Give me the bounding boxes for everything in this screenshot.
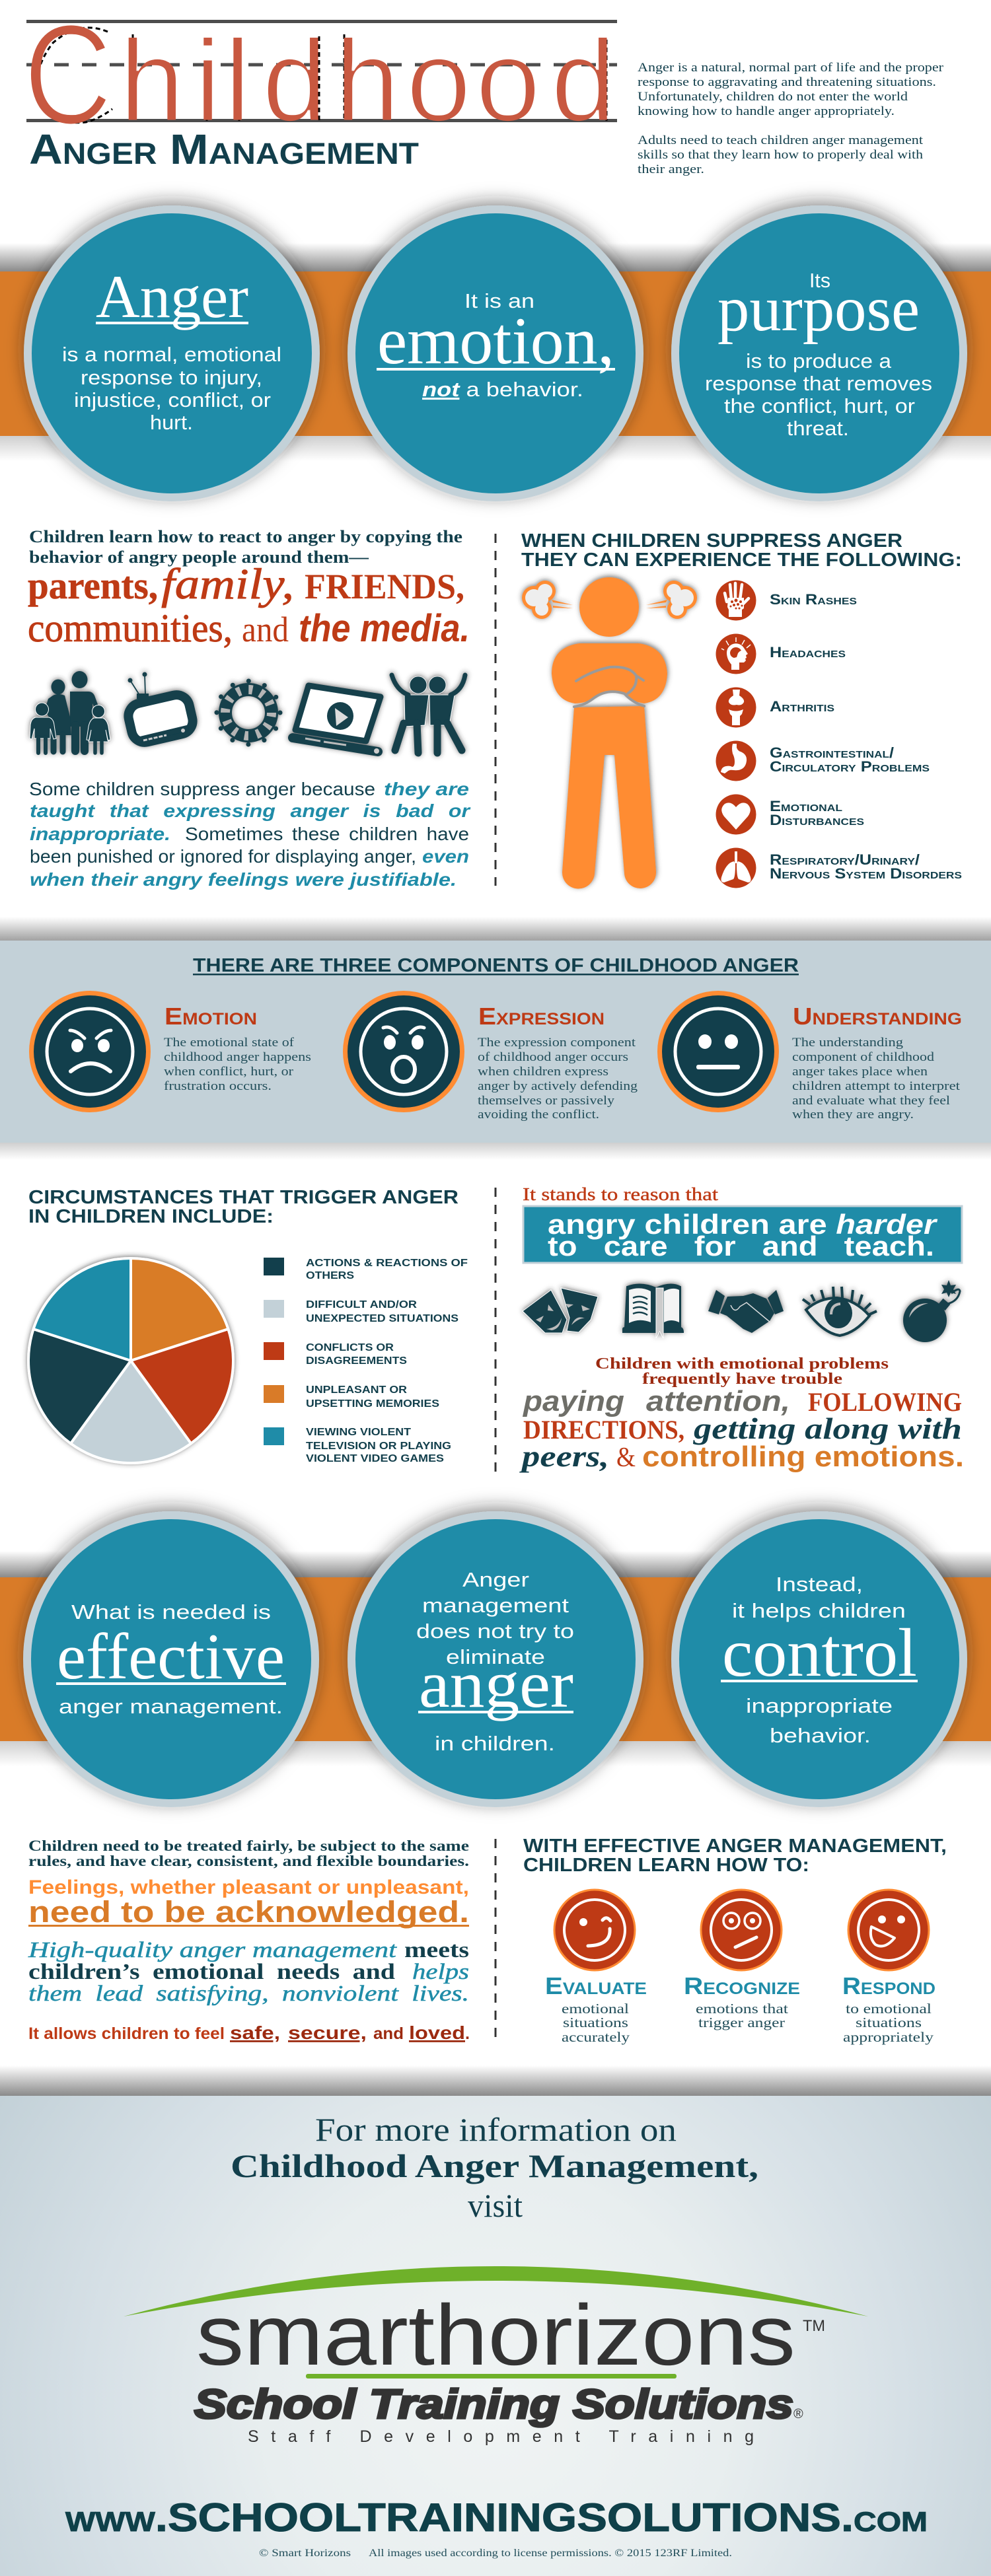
text: high-quality anger management (28, 1938, 469, 2006)
text: high-quality anger management: meets (404, 1938, 469, 1962)
text: feelings need to be acknowledged (28, 1877, 469, 1929)
circle: anger management does not eliminate: in children. (435, 1732, 555, 1755)
labels: suppressed anger effects: Emotional (770, 798, 842, 814)
circle: purpose: is to produce a (746, 349, 892, 373)
intro text: Unfortunately, children do not enter the world (638, 90, 908, 104)
legend: triggers: ACTIONS & REACTIONS OF (306, 1258, 468, 1269)
step: respond: to emotional (846, 2001, 932, 2017)
text: for more information (231, 2111, 758, 2224)
legend: triggers: OTHERS (306, 1270, 354, 1281)
text: children copy anger: behavior of angry people around them— (29, 548, 369, 567)
circle: control: Instead, (776, 1573, 863, 1596)
step: recognize (684, 1972, 800, 2030)
circle: control: behavior. (770, 1724, 871, 1747)
text: children with emotional problems: Children with emotional problems (595, 1355, 889, 1373)
text: why children suppress anger: they are (384, 779, 469, 799)
text: why children suppress anger: taught that expressing anger is bad or (30, 801, 471, 821)
component: understanding: component of childhood (792, 1050, 935, 1064)
big text: troubles list: DIRECTIONS, (523, 1415, 684, 1445)
component: understanding: anger takes place when (792, 1065, 928, 1079)
text: high-quality anger management: High-quality anger management (28, 1938, 398, 1962)
component: expression (478, 1003, 638, 1122)
labels: suppressed anger effects: Arthritis (770, 698, 834, 715)
step: recognize: Recognize (684, 1972, 800, 1999)
component: expression: Expression (478, 1003, 605, 1030)
legend: triggers: TELEVISION OR PLAYING (306, 1441, 451, 1452)
text: for more information: For more information on (315, 2111, 677, 2148)
text: why children suppress anger: when their angry feelings were justifiable. (30, 869, 457, 890)
legend: triggers: DIFFICULT AND/OR (306, 1299, 418, 1310)
component: emotion: Emotion (165, 1003, 257, 1030)
step: respond: appropriately (843, 2029, 934, 2045)
orange band top (0, 243, 991, 461)
text: for more information: Childhood Anger Management, (231, 2147, 758, 2184)
pie chart: triggers (28, 1258, 233, 1463)
legend: triggers: VIOLENT VIDEO GAMES (306, 1453, 444, 1464)
labels: suppressed anger effects: Disturbances (770, 812, 864, 828)
circle: effective: anger management. (59, 1695, 283, 1718)
labels: suppressed anger effects: Skin Rashes (770, 591, 857, 608)
circle: anger management does not eliminate: Anger (462, 1568, 529, 1591)
callout: harder to care for: to care for and teach. (548, 1231, 934, 1262)
heading: with effective anger management: WITH EFFECTIVE ANGER MANAGEMENT, (523, 1836, 947, 1857)
logo: smart horizons (124, 2266, 868, 2446)
callout: harder to care for (523, 1206, 962, 1263)
circle: effective: What is needed is (71, 1600, 271, 1624)
title: Childhood on handwriting lines: C (24, 0, 112, 154)
step: recognize: trigger anger (698, 2015, 785, 2030)
text: it stands to reason: It stands to reason that (523, 1184, 719, 1204)
intro text: their anger. (638, 162, 704, 176)
text: safe secure loved: secure, (288, 2022, 367, 2043)
icon: television (126, 672, 196, 745)
big text: troubles list: paying (523, 1385, 624, 1417)
intro text: Anger is a natural, normal part of life and the proper (638, 61, 944, 75)
circle: Anger (24, 205, 320, 501)
heading: with effective anger management: CHILDREN LEARN HOW TO: (523, 1855, 809, 1876)
icon: neutral face (657, 991, 779, 1112)
copyright: All images used according to license permissions. © 2015 123RF Limited. (369, 2548, 732, 2559)
icon: stomach (716, 741, 756, 781)
text: boundaries: Children need to be treated fairly, be subject to the same (28, 1838, 469, 1854)
logo: smart horizons: Staff Development Training (248, 2427, 760, 2446)
heading: when children suppress anger: WHEN CHILDREN SUPPRESS ANGER (521, 530, 902, 552)
step: respond (842, 1972, 936, 2045)
icon: skin rashes (716, 580, 756, 621)
step: evaluate: Evaluate (545, 1972, 647, 1999)
circle: control: inappropriate (746, 1694, 893, 1717)
labels: suppressed anger effects: Headaches (770, 644, 846, 661)
legend: triggers: UNEXPECTED SITUATIONS (306, 1313, 459, 1324)
text: boundaries (28, 1838, 469, 1869)
text: for more information: visit (468, 2187, 523, 2224)
labels: suppressed anger effects: Respiratory/Urinary/ (770, 851, 920, 868)
circle: purpose: Its (809, 269, 830, 292)
circle: anger management does not eliminate: management (422, 1594, 569, 1617)
step: evaluate: emotional (562, 2001, 629, 2017)
big text: troubles list: & (616, 1443, 636, 1473)
step: recognize: emotions that (696, 2001, 788, 2017)
step: evaluate: accurately (562, 2029, 630, 2045)
text: safe secure loved: loved (409, 2022, 465, 2043)
text: boundaries: rules, and have clear, consistent, and flexible boundaries. (28, 1853, 469, 1869)
panel: footer (0, 2065, 991, 2576)
component: expression: of childhood anger occurs (478, 1050, 628, 1064)
circle: purpose (671, 205, 967, 501)
text: why children suppress anger: Sometimes these children have (185, 824, 469, 844)
icon: angry face (29, 991, 151, 1112)
icon: circle of people (217, 681, 280, 744)
circle: anger management does not eliminate: eliminate (446, 1645, 545, 1668)
circle: effective (23, 1511, 319, 1807)
labels: suppressed anger effects: Circulatory Problems (770, 758, 930, 775)
text: why children suppress anger: even (422, 846, 469, 867)
callout: harder to care for: angry children are harder (548, 1209, 938, 1240)
icon: winking face (554, 1890, 635, 1970)
circle: control: control (722, 1615, 917, 1691)
text: safe secure loved: and (373, 2024, 404, 2043)
icon: friends cheering (392, 675, 465, 753)
labels: suppressed anger effects: Gastrointestinal/ (770, 744, 894, 761)
text: why children suppress anger: Some children suppress anger because (29, 779, 375, 799)
icon: handshake (708, 1290, 784, 1333)
component: expression: themselves or passively (478, 1094, 615, 1108)
legend: triggers: UPSETTING MEMORIES (306, 1398, 439, 1410)
step: respond: situations (856, 2015, 922, 2030)
text: children with emotional problems: frequently have trouble (642, 1371, 842, 1388)
text: high-quality anger management: children’s emotional needs and (28, 1960, 395, 1984)
text: children copy anger (29, 527, 462, 567)
text: high-quality anger management: them lead satisfying, nonviolent lives. (28, 1982, 469, 2006)
circle: control: it helps children (732, 1599, 906, 1622)
legend: triggers: CONFLICTS OR (306, 1342, 394, 1353)
big text: parents family friends communities media: FRIENDS, (305, 567, 464, 606)
component: emotion: childhood anger happens (164, 1050, 311, 1064)
icon: bomb (903, 1280, 960, 1342)
logo: smart horizons: ® (793, 2407, 803, 2421)
icon: open book (623, 1284, 683, 1338)
intro text: Adults need to teach children anger management (638, 133, 924, 147)
text: why children suppress anger: inappropriate. (30, 824, 170, 844)
text: safe secure loved: safe, (230, 2022, 280, 2043)
circle: Anger: response to injury, (81, 366, 262, 389)
intro text (638, 61, 944, 176)
icon: lungs (716, 848, 756, 888)
heading: three components: THERE ARE THREE COMPONENTS OF CHILDHOOD ANGER (193, 955, 799, 976)
circle: purpose: purpose (717, 273, 920, 344)
icon: theatre masks (523, 1288, 598, 1333)
big text: parents family friends communities media: communities, (28, 606, 233, 650)
circle: emotion: emotion, (377, 304, 614, 378)
intro text: response to aggravating and threatening situations. (638, 75, 936, 89)
component: expression: The expression component (478, 1036, 636, 1050)
step: respond: Respond (842, 1972, 936, 1999)
text: children with emotional problems (595, 1355, 889, 1388)
icon: family (30, 671, 110, 753)
icon: talking face (848, 1890, 929, 1970)
big text: parents family friends communities media: and (242, 610, 289, 649)
circle: anger management does not eliminate: does not try to (416, 1620, 574, 1643)
legend: triggers: VIEWING VIOLENT (306, 1427, 411, 1438)
component: emotion (164, 1003, 311, 1093)
legend: triggers (264, 1258, 468, 1464)
big text: troubles list (519, 1385, 964, 1473)
text: why children suppress anger (29, 779, 471, 890)
heading: when children suppress anger (521, 530, 962, 571)
heading: circumstances: CIRCUMSTANCES THAT TRIGGER ANGER (28, 1187, 459, 1208)
circle: effective: effective (57, 1621, 285, 1693)
panel: three components (0, 917, 991, 1160)
icon: video laptop (293, 686, 381, 754)
subtitle: Anger Management: Anger Management (29, 125, 419, 173)
title: Childhood on handwriting lines: hildhood (120, 17, 616, 146)
logo: smart horizons: smarthorizons (196, 2287, 795, 2383)
icon: heart (716, 794, 756, 835)
big text: troubles list: FOLLOWING (808, 1387, 962, 1417)
big text: parents family friends communities media: the media. (299, 607, 470, 650)
orange band middle (0, 1551, 991, 1766)
circle: Anger: injustice, conflict, or (74, 388, 271, 411)
icon: arthritis (716, 687, 756, 728)
component: emotion: when conflict, hurt, or (164, 1065, 294, 1079)
component: understanding: The understanding (792, 1036, 904, 1050)
circle: emotion: It is an (464, 289, 534, 312)
circle: purpose: threat. (787, 417, 849, 440)
component: emotion: The emotional state of (164, 1036, 295, 1050)
heading: when children suppress anger: THEY CAN EXPERIENCE THE FOLLOWING: (521, 550, 962, 571)
text: high-quality anger management: helps (412, 1960, 469, 1984)
big text: parents family friends communities media (28, 560, 470, 650)
component: expression: anger by actively defending (478, 1079, 638, 1093)
component: expression: avoiding the conflict. (478, 1108, 599, 1122)
legend: triggers: UNPLEASANT OR (306, 1384, 407, 1396)
circle: anger management does not eliminate (348, 1511, 643, 1807)
text: feelings need to be acknowledged: need to be acknowledged. (28, 1895, 469, 1929)
text: feelings need to be acknowledged: Feelings, whether pleasant or unpleasant, (28, 1877, 469, 1898)
figure: angry child with steam (522, 577, 697, 888)
icon: headaches (716, 634, 756, 674)
component: understanding (792, 1003, 962, 1122)
component: expression: when children express (478, 1065, 608, 1079)
big text: parents family friends communities media: family, (161, 560, 294, 608)
circle: control (671, 1511, 967, 1807)
text: why children suppress anger: been punished or ignored for displaying anger, (30, 846, 416, 867)
step: evaluate: situations (563, 2015, 628, 2030)
component: understanding: when they are angry. (792, 1108, 914, 1122)
step: evaluate (545, 1972, 647, 2045)
big text: parents family friends communities media: parents, (28, 564, 158, 607)
circle: anger management does not eliminate: anger (419, 1647, 573, 1722)
component: emotion: frustration occurs. (164, 1079, 272, 1093)
big text: troubles list: peers, (519, 1439, 609, 1473)
intro text: skills so that they learn how to properly deal with (638, 148, 924, 162)
circle: emotion: not a behavior. (422, 378, 583, 401)
text: safe secure loved: It allows children to feel (28, 2024, 225, 2043)
heading: circumstances: IN CHILDREN INCLUDE: (28, 1206, 274, 1227)
icon: eye (803, 1287, 877, 1336)
labels: suppressed anger effects (770, 591, 962, 882)
big text: troubles list: getting along with (693, 1412, 962, 1445)
big text: troubles list: attention, (646, 1385, 790, 1417)
legend: triggers: DISAGREEMENTS (306, 1355, 407, 1367)
component: understanding: Understanding (793, 1003, 962, 1030)
website url: www.SCHOOLTRAININGSOLUTIONS.com (65, 2495, 928, 2540)
text: safe secure loved: . (465, 2024, 470, 2043)
circle: Anger: hurt. (150, 411, 193, 434)
copyright (259, 2548, 732, 2559)
intro text: knowing how to handle anger appropriately. (638, 104, 895, 118)
logo: smart horizons: School Training Solutions (194, 2382, 793, 2427)
icon: shouting face (343, 991, 464, 1112)
heading: with effective anger management (523, 1836, 947, 1876)
component: understanding: and evaluate what they feel (792, 1094, 950, 1108)
logo: smart horizons: TM (803, 2317, 825, 2335)
heading: circumstances (28, 1187, 459, 1227)
big text: troubles list: controlling emotions. (642, 1441, 964, 1473)
circle: Anger: is a normal, emotional (62, 343, 281, 366)
circle: Anger: Anger (96, 263, 248, 330)
icon: thinking face with glasses (701, 1890, 782, 1970)
component: understanding: children attempt to interpret (792, 1079, 961, 1093)
labels: suppressed anger effects: Nervous System Disorders (770, 865, 962, 882)
text: children copy anger: Children learn how to react to anger by copying the (29, 527, 462, 546)
circle: emotion (348, 205, 643, 501)
copyright: © Smart Horizons (259, 2548, 351, 2559)
text: safe secure loved (28, 2022, 470, 2043)
circle: purpose: response that removes (705, 372, 932, 395)
circle: purpose: the conflict, hurt, or (724, 394, 915, 417)
